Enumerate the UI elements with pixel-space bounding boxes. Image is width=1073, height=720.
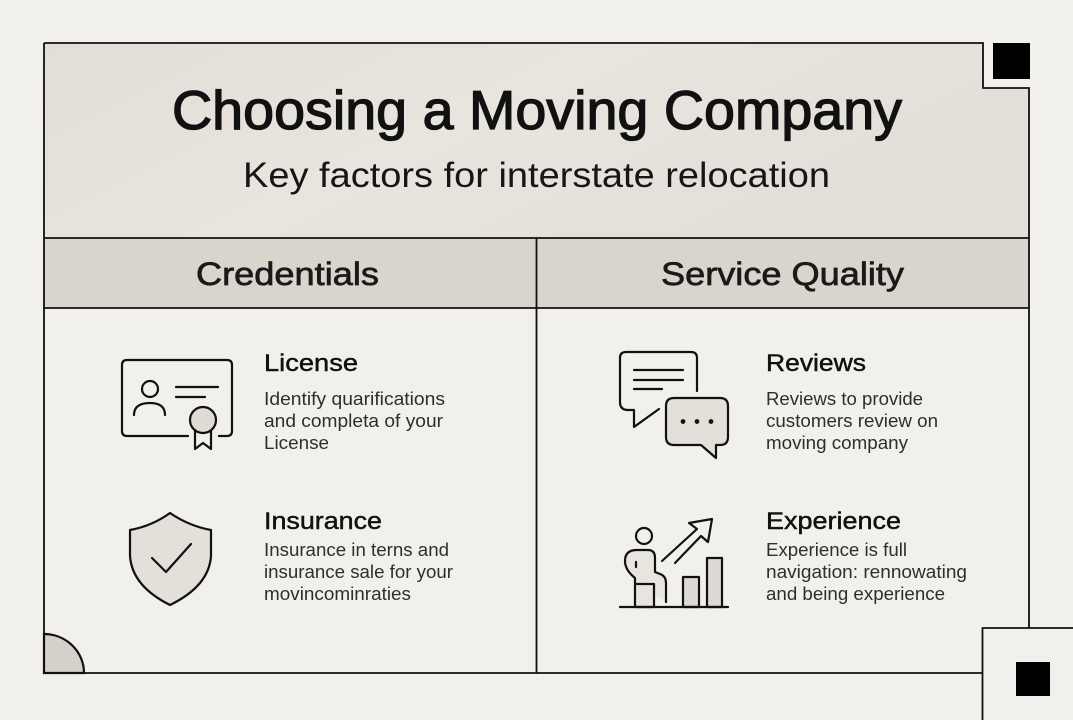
subtitle: Key factors for interstate relocation: [243, 156, 830, 195]
text: experience: Experience: [766, 508, 901, 535]
text: license: and completa of your: [264, 411, 443, 431]
text: reviews: Reviews: [766, 350, 866, 377]
text: license: [264, 350, 445, 453]
text: license: License: [264, 433, 329, 453]
text: experience: [766, 508, 967, 604]
icon: person with growth chart: [620, 519, 728, 607]
heading: service quality: Service Quality: [661, 256, 904, 292]
text: insurance: Insurance: [264, 508, 382, 535]
icon: review bubbles: [620, 352, 728, 458]
text: experience: and being experience: [766, 584, 945, 604]
text: insurance: insurance sale for your: [264, 562, 453, 582]
text: license: License: [264, 350, 358, 377]
text: reviews: [766, 350, 938, 453]
text: experience: Experience is full: [766, 540, 907, 560]
text: reviews: moving company: [766, 433, 908, 453]
text: reviews: Reviews to provide: [766, 389, 923, 409]
corner: top right square: [993, 43, 1030, 79]
corner: bottom left quarter circle: [44, 634, 84, 673]
icon: shield: [130, 513, 211, 605]
icon: license card: [122, 360, 232, 449]
text: insurance: movincominraties: [264, 584, 411, 604]
text: license: Identify quarifications: [264, 389, 445, 409]
heading: credentials: Credentials: [196, 256, 379, 292]
corner: bottom right box: [982, 628, 1073, 720]
text: insurance: Insurance in terns and: [264, 540, 449, 560]
text: reviews: customers review on: [766, 411, 938, 431]
text: experience: navigation: rennowating: [766, 562, 967, 582]
text: insurance: [264, 508, 453, 604]
title: Choosing a Moving Company: [172, 79, 903, 141]
